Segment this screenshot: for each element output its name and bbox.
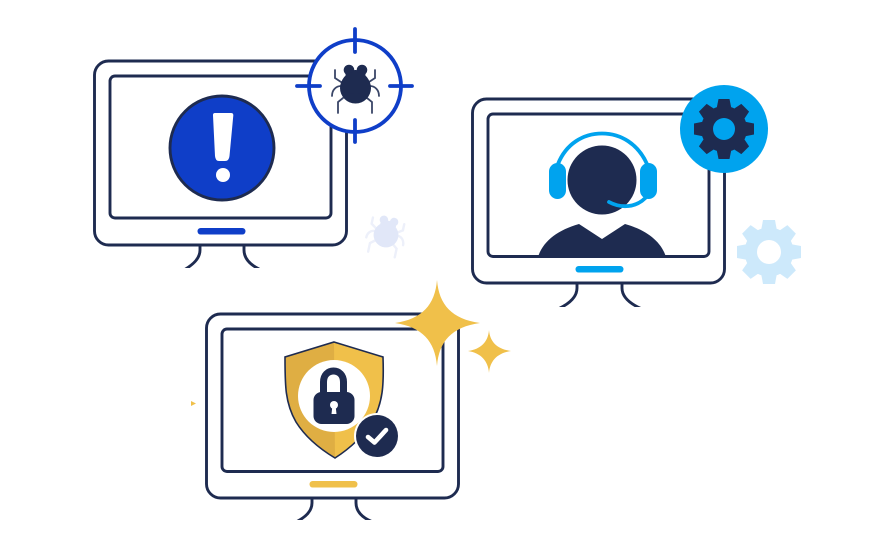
icon: bug target <box>297 29 412 142</box>
icon: faded bug <box>363 213 408 258</box>
monitor: support agent <box>472 99 724 309</box>
icon: security shield with lock <box>285 342 400 459</box>
illustration <box>93 27 801 520</box>
icon: faded gear <box>737 220 801 284</box>
monitor: security <box>206 314 458 522</box>
icon: support agent with headset <box>538 134 666 257</box>
icon: gear badge <box>680 85 768 173</box>
icon: exclamation alert <box>170 96 274 200</box>
icon: bug <box>332 65 379 113</box>
monitor: alert <box>94 61 346 270</box>
icon: check badge <box>354 413 400 459</box>
icon: tiny sparkle <box>191 401 196 406</box>
icon: large sparkle <box>395 280 480 366</box>
icon: small sparkle <box>468 330 511 373</box>
